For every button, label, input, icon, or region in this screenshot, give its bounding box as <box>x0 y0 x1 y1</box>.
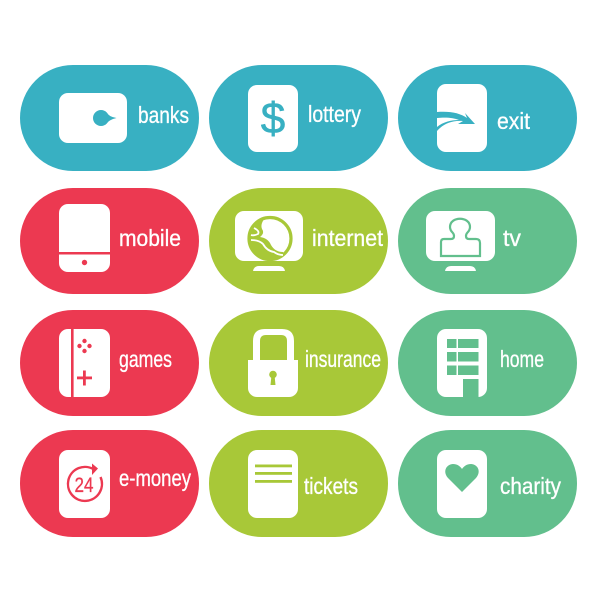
pill: e-money <box>20 430 199 537</box>
label: internet: internet <box>312 225 384 251</box>
pill: games <box>20 310 199 416</box>
icon: dollar card <box>248 85 298 152</box>
label: games: games <box>119 346 172 372</box>
pill: mobile <box>20 188 199 294</box>
pill: lottery <box>209 65 388 171</box>
label: e-money: e-money <box>119 465 191 491</box>
pill: tv <box>398 188 577 294</box>
icon: dollar card: $ <box>261 94 285 143</box>
icon: game console <box>59 329 110 397</box>
label: mobile: mobile <box>119 225 181 251</box>
pill: insurance <box>209 310 388 416</box>
icon: phone <box>59 204 110 272</box>
label: banks: banks <box>138 102 189 128</box>
icon: heart card <box>437 450 487 518</box>
icon: ticket card <box>248 450 298 518</box>
pill: home <box>398 310 577 416</box>
label: tickets: tickets <box>304 473 358 499</box>
icon: exit door with arrow <box>437 84 487 152</box>
icon: padlock <box>248 329 298 397</box>
pill: internet <box>209 188 388 294</box>
pill: banks <box>20 65 199 171</box>
icon: 24 hour card: 24 <box>74 474 94 497</box>
label: insurance: insurance <box>305 346 381 372</box>
icon: building <box>437 329 487 397</box>
label: exit: exit <box>497 108 531 134</box>
icon: globe monitor <box>235 211 303 271</box>
icon: wallet card <box>59 93 127 143</box>
icon: person monitor <box>426 211 495 271</box>
label: lottery: lottery <box>308 101 361 127</box>
icon: 24 hour card <box>59 450 110 518</box>
pill: exit <box>398 65 577 171</box>
label: tv: tv <box>503 225 522 251</box>
pill: charity <box>398 430 577 537</box>
label: home: home <box>500 346 544 372</box>
label: charity: charity <box>500 473 561 499</box>
pill: tickets <box>209 430 388 537</box>
